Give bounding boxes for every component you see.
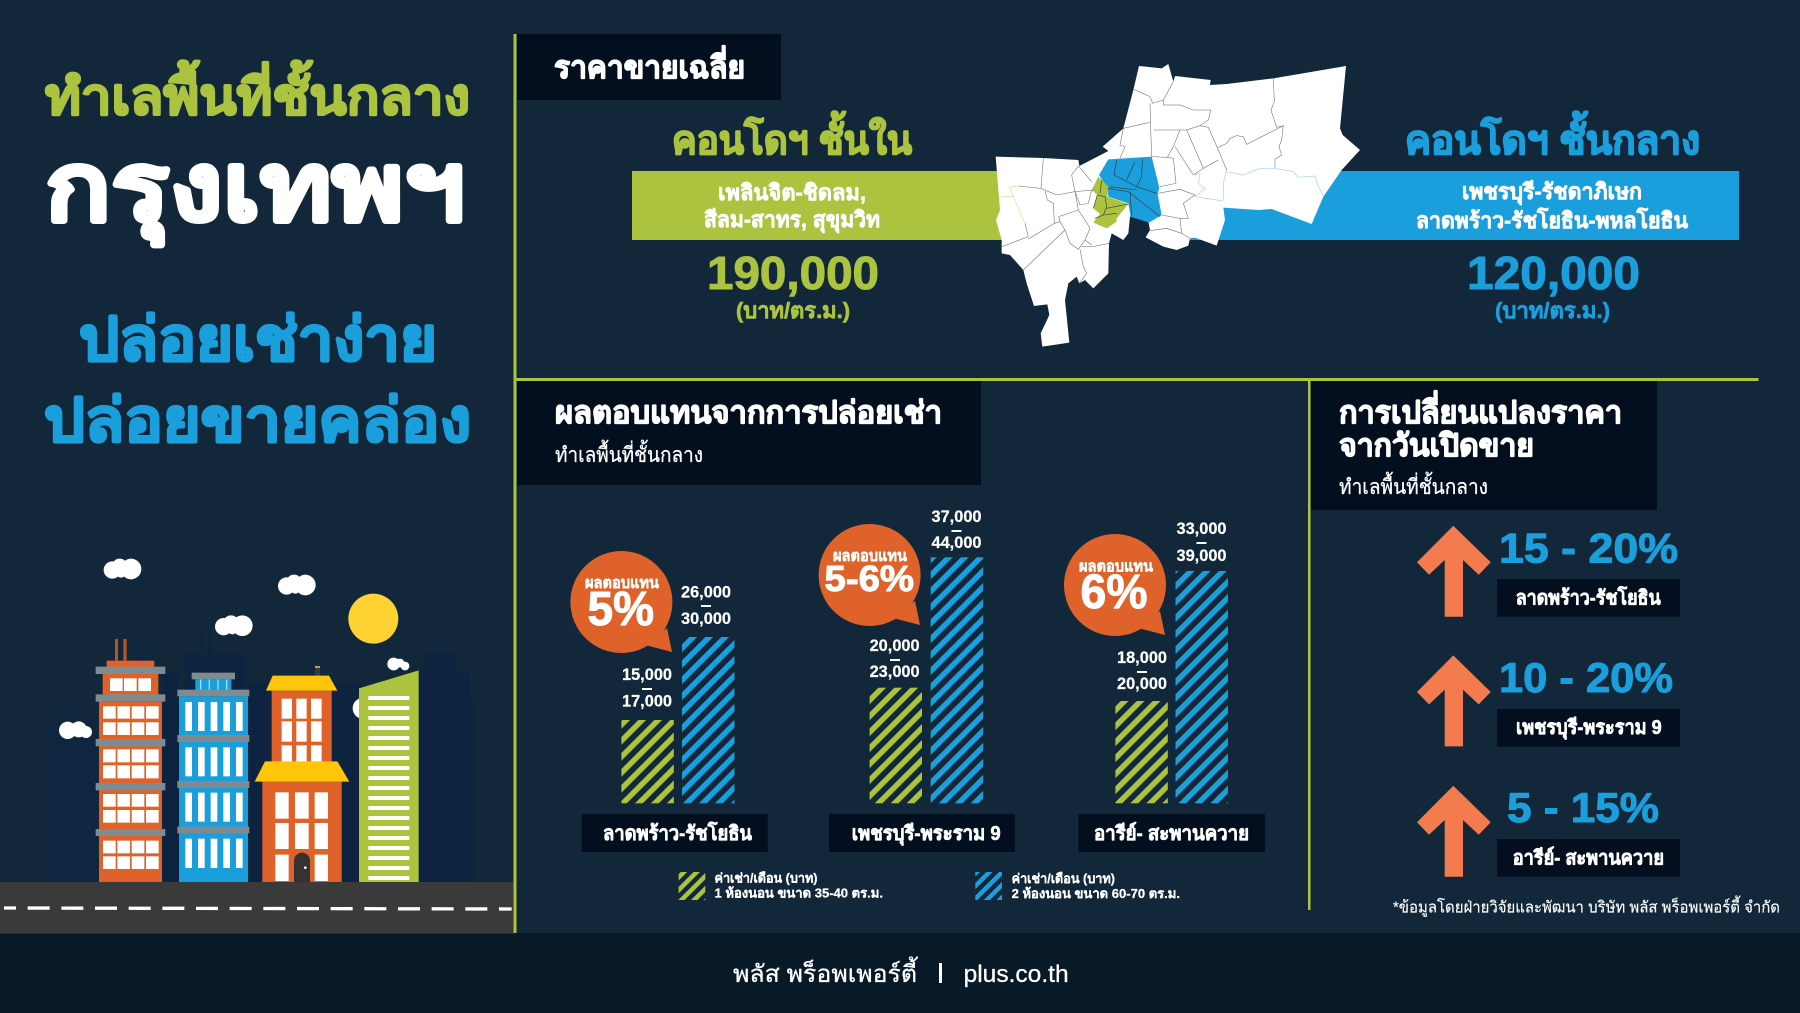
bars: Lat Phrao - Ratchayothin — [582, 584, 768, 852]
green tower — [359, 670, 419, 882]
title block: กรุงเทพฯ — [45, 135, 465, 246]
legend: ค่าเช่า/เดือน (บาท) — [1012, 871, 1115, 886]
bars: Lat Phrao - Ratchayothin: 15,000 — [622, 666, 672, 684]
price change: Phetchaburi — [1417, 654, 1680, 747]
panel heading: price change — [1311, 381, 1657, 510]
mid city condo: (บาท/ตร.ม.) — [1495, 298, 1610, 323]
mid city condo: 120,000 — [1467, 247, 1640, 299]
bars: Ari - Saphan Khwai: 39,000 — [1176, 547, 1226, 565]
title block: ปล่อยขายคล่อง — [44, 387, 471, 454]
road — [0, 882, 513, 934]
price bands — [632, 171, 1739, 240]
mid city condo — [1405, 111, 1700, 323]
title block: ทำเลพื้นที่ชั้นกลาง — [45, 60, 470, 125]
bars: Lat Phrao - Ratchayothin: 30,000 — [681, 610, 731, 628]
bars: Ari - Saphan Khwai — [1078, 520, 1265, 852]
price change: Lat Phrao: ลาดพร้าว-รัชโยธิน — [1516, 585, 1661, 609]
bars: Lat Phrao - Ratchayothin: 17,000 — [622, 692, 672, 710]
price change: Ari — [1417, 784, 1680, 877]
bars: Ari - Saphan Khwai: 18,000 — [1117, 649, 1167, 667]
title block: ปล่อยเช่าง่าย — [79, 306, 437, 373]
mid city condo: คอนโดฯ ชั้นกลาง — [1405, 111, 1700, 163]
footer bar: พลัส พร็อพเพอร์ตี้ — [733, 956, 918, 988]
callout: yield 6% — [1064, 534, 1166, 636]
inner city condo: สีลม-สาทร, สุขุมวิท — [704, 207, 880, 234]
bars: Ari - Saphan Khwai: 20,000 — [1117, 675, 1167, 693]
callout: yield 5-6%: 5-6% — [824, 558, 914, 599]
bars: Ari - Saphan Khwai: อารีย์- สะพานควาย — [1094, 822, 1249, 845]
inner city condo: คอนโดฯ ชั้นใน — [672, 111, 912, 163]
panel heading: rental yield: ทำเลพื้นที่ชั้นกลาง — [555, 440, 703, 467]
bars: Lat Phrao - Ratchayothin: 26,000 — [681, 584, 731, 602]
mid city condo: ลาดพร้าว-รัชโยธิน-พหลโยธิน — [1416, 207, 1688, 233]
bars: Phetchaburi - Rama 9: 37,000 — [932, 508, 982, 526]
blue tower — [177, 673, 249, 882]
mid city condo: เพชรบุรี-รัชดาภิเษก — [1462, 179, 1642, 206]
legend: 2 ห้องนอน ขนาด 60-70 ตร.ม. — [1012, 886, 1180, 901]
callout: yield 5%: 5% — [588, 583, 654, 636]
heading: average sale price — [517, 34, 781, 100]
panel heading: price change: การเปลี่ยนแปลงราคา — [1339, 390, 1622, 430]
bar chart: rents — [582, 508, 1265, 852]
callout: yield 5% — [570, 551, 672, 653]
inner city condo: (บาท/ตร.ม.) — [736, 298, 850, 323]
callout: yield 6%: 6% — [1080, 566, 1148, 619]
yellow roof building — [255, 666, 349, 883]
callout: yield 6%: ผลตอบแทน — [1079, 558, 1153, 576]
price change: Phetchaburi: 10 - 20% — [1499, 654, 1673, 701]
legend: ค่าเช่า/เดือน (บาท) — [714, 870, 818, 886]
footer bar — [0, 933, 1800, 1013]
panel heading: price change: จากวันเปิดขาย — [1339, 428, 1534, 463]
price change: Lat Phrao: 15 - 20% — [1499, 525, 1678, 572]
sun — [348, 594, 398, 644]
bars: Phetchaburi - Rama 9 — [829, 508, 1015, 852]
legend — [679, 870, 1180, 901]
orange tower — [96, 639, 165, 882]
heading: average sale price: ราคาขายเฉลี่ย — [554, 45, 745, 85]
inner city condo: 190,000 — [707, 247, 879, 299]
bars: Lat Phrao - Ratchayothin: ลาดพร้าว-รัชโยธิน — [603, 821, 752, 845]
bars: Phetchaburi - Rama 9: เพชรบุรี-พระราม 9 — [852, 822, 1001, 846]
city illustration — [0, 559, 513, 934]
panel heading: rental yield: ผลตอบแทนจากการปล่อยเช่า — [555, 395, 942, 430]
clouds — [59, 559, 409, 739]
price change: Phetchaburi: เพชรบุรี-พระราม 9 — [1516, 716, 1662, 740]
bars: Ari - Saphan Khwai: 33,000 — [1176, 520, 1226, 538]
callout: yield 5%: ผลตอบแทน — [585, 575, 659, 592]
callout: yield 5-6%: ผลตอบแทน — [833, 548, 907, 565]
map of Bangkok — [996, 64, 1360, 347]
title block — [44, 60, 471, 454]
legend: 1 ห้องนอน ขนาด 35-40 ตร.ม. — [714, 886, 883, 900]
callout: yield 5-6% — [819, 524, 921, 626]
price change: Lat Phrao — [1417, 525, 1680, 617]
inner city condo: เพลินจิต-ชิดลม, — [718, 180, 866, 205]
panel heading: rental yield — [517, 381, 981, 485]
inner city condo — [672, 111, 912, 323]
bars: Phetchaburi - Rama 9: 44,000 — [932, 534, 982, 552]
footer bar: plus.co.th — [964, 961, 1069, 988]
bars: Phetchaburi - Rama 9: 23,000 — [870, 663, 920, 681]
price change: Ari: 5 - 15% — [1507, 784, 1659, 831]
bars: Phetchaburi - Rama 9: 20,000 — [870, 637, 920, 655]
price change: Ari: อารีย์- สะพานควาย — [1513, 847, 1664, 870]
panel: average sale price — [517, 34, 1700, 323]
footnote: *ข้อมูลโดยฝ่ายวิจัยและพัฒนา บริษัท พลัส พร็อพเพอร์ตี้ จำกัด — [1393, 896, 1780, 918]
panel heading: price change: ทำเลพื้นที่ชั้นกลาง — [1339, 472, 1488, 499]
